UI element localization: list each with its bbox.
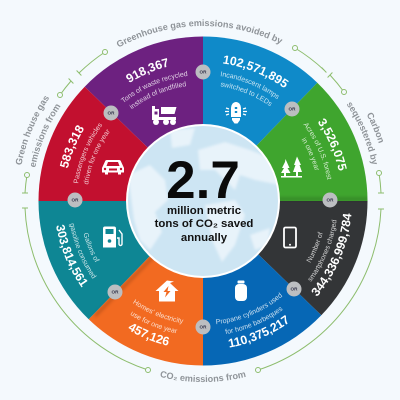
blue: propane text: for home barbeques — [225, 307, 282, 334]
green: forest text: Acres of U.S. forest — [303, 123, 332, 180]
wheel of eight segments — [38, 36, 370, 366]
OR badges: OR — [327, 198, 334, 203]
segment: blue lamps — [203, 36, 317, 201]
dark: smartphones text: smartphones charged — [308, 220, 336, 282]
headline caption — [155, 205, 253, 244]
headline caption: tons of CO₂ saved — [155, 218, 253, 230]
OR badges: OR — [72, 198, 79, 203]
dark: smartphones text: 344,336,999,784 — [312, 214, 352, 296]
label: CO2 emissions from: CO₂ emissions from — [160, 371, 246, 382]
label: carbon sequestered by: sequestered by — [347, 102, 377, 164]
label: green house gas emissions from: emissions from — [31, 104, 60, 167]
segment: green forest — [203, 83, 368, 201]
red: vehicles text: driven for one year — [84, 129, 110, 184]
green: forest text: 3,526,075 — [318, 118, 347, 170]
orange: homes text — [128, 299, 184, 346]
green: forest text: in one year — [302, 137, 319, 170]
orange: homes text: use for one year — [130, 312, 178, 334]
purple: waste text: instead of landfilled — [129, 81, 186, 110]
blue: lamps text: 102,571,895 — [223, 56, 289, 88]
segment: orange homes — [89, 201, 203, 366]
blue: lamps text — [220, 56, 289, 106]
orange: homes text: Homes' electricity — [133, 299, 184, 324]
teal: gasoline text: Gallons of — [84, 233, 100, 262]
headline caption: annually — [181, 232, 228, 244]
OR badges: OR — [291, 287, 298, 292]
headline caption: million metric — [167, 205, 241, 217]
red: vehicles text: Passengers vehicles — [73, 123, 102, 184]
dark: smartphones text: Number of — [306, 232, 323, 263]
label: green house gas emissions from: Green house gas — [16, 96, 49, 165]
blue: lamps text: switched to LEDs — [220, 82, 272, 106]
teal: gasoline text: 303,814,561 — [56, 224, 88, 288]
OR badges: OR — [200, 325, 207, 330]
label: carbon sequestered by: Carbon — [368, 112, 383, 144]
segment: dark smartphones — [203, 201, 368, 315]
OR badges — [68, 64, 338, 334]
blue: lamps text: Incandescent lamps — [220, 72, 279, 99]
headline figure: 2.7 — [166, 151, 240, 210]
icon: dump truck — [152, 106, 176, 125]
teal: gasoline text: gasoline consumed — [68, 224, 97, 279]
label: greenhouse gas emissions avoided by: Greenhouse gas emissions avoided by — [116, 19, 282, 46]
outer bracket arcs — [22, 46, 384, 372]
icon: car — [102, 160, 124, 174]
red: vehicles text — [60, 123, 110, 184]
blue: propane text: 110,375,217 — [228, 315, 288, 348]
icon: trees — [281, 156, 302, 178]
red: vehicles text: 583,318 — [60, 125, 84, 168]
green: forest text — [302, 118, 347, 180]
OR badges: OR — [200, 70, 207, 75]
central globe — [126, 124, 280, 278]
orange: homes text: 457,126 — [128, 324, 170, 346]
icon: gas pump — [103, 226, 122, 248]
segment: teal gasoline — [38, 201, 203, 319]
icon: smartphone — [284, 228, 296, 248]
icon: house with bolt — [156, 280, 178, 302]
icon: LED bulb — [225, 102, 247, 124]
OR badges: OR — [112, 290, 119, 295]
segment: red vehicles — [38, 87, 203, 201]
OR badges: OR — [108, 111, 115, 116]
blue: propane text: Propane cylinders used — [216, 292, 282, 324]
OR badges: OR — [289, 107, 296, 112]
purple: waste text: 918,367 — [126, 58, 168, 82]
segment: blue propane — [203, 201, 321, 366]
purple: waste text — [120, 58, 188, 110]
icon: propane cylinder — [235, 280, 247, 301]
segment: purple waste — [85, 36, 203, 201]
blue: propane text — [216, 292, 288, 348]
purple: waste text: Tons of waste recycled — [120, 70, 188, 102]
